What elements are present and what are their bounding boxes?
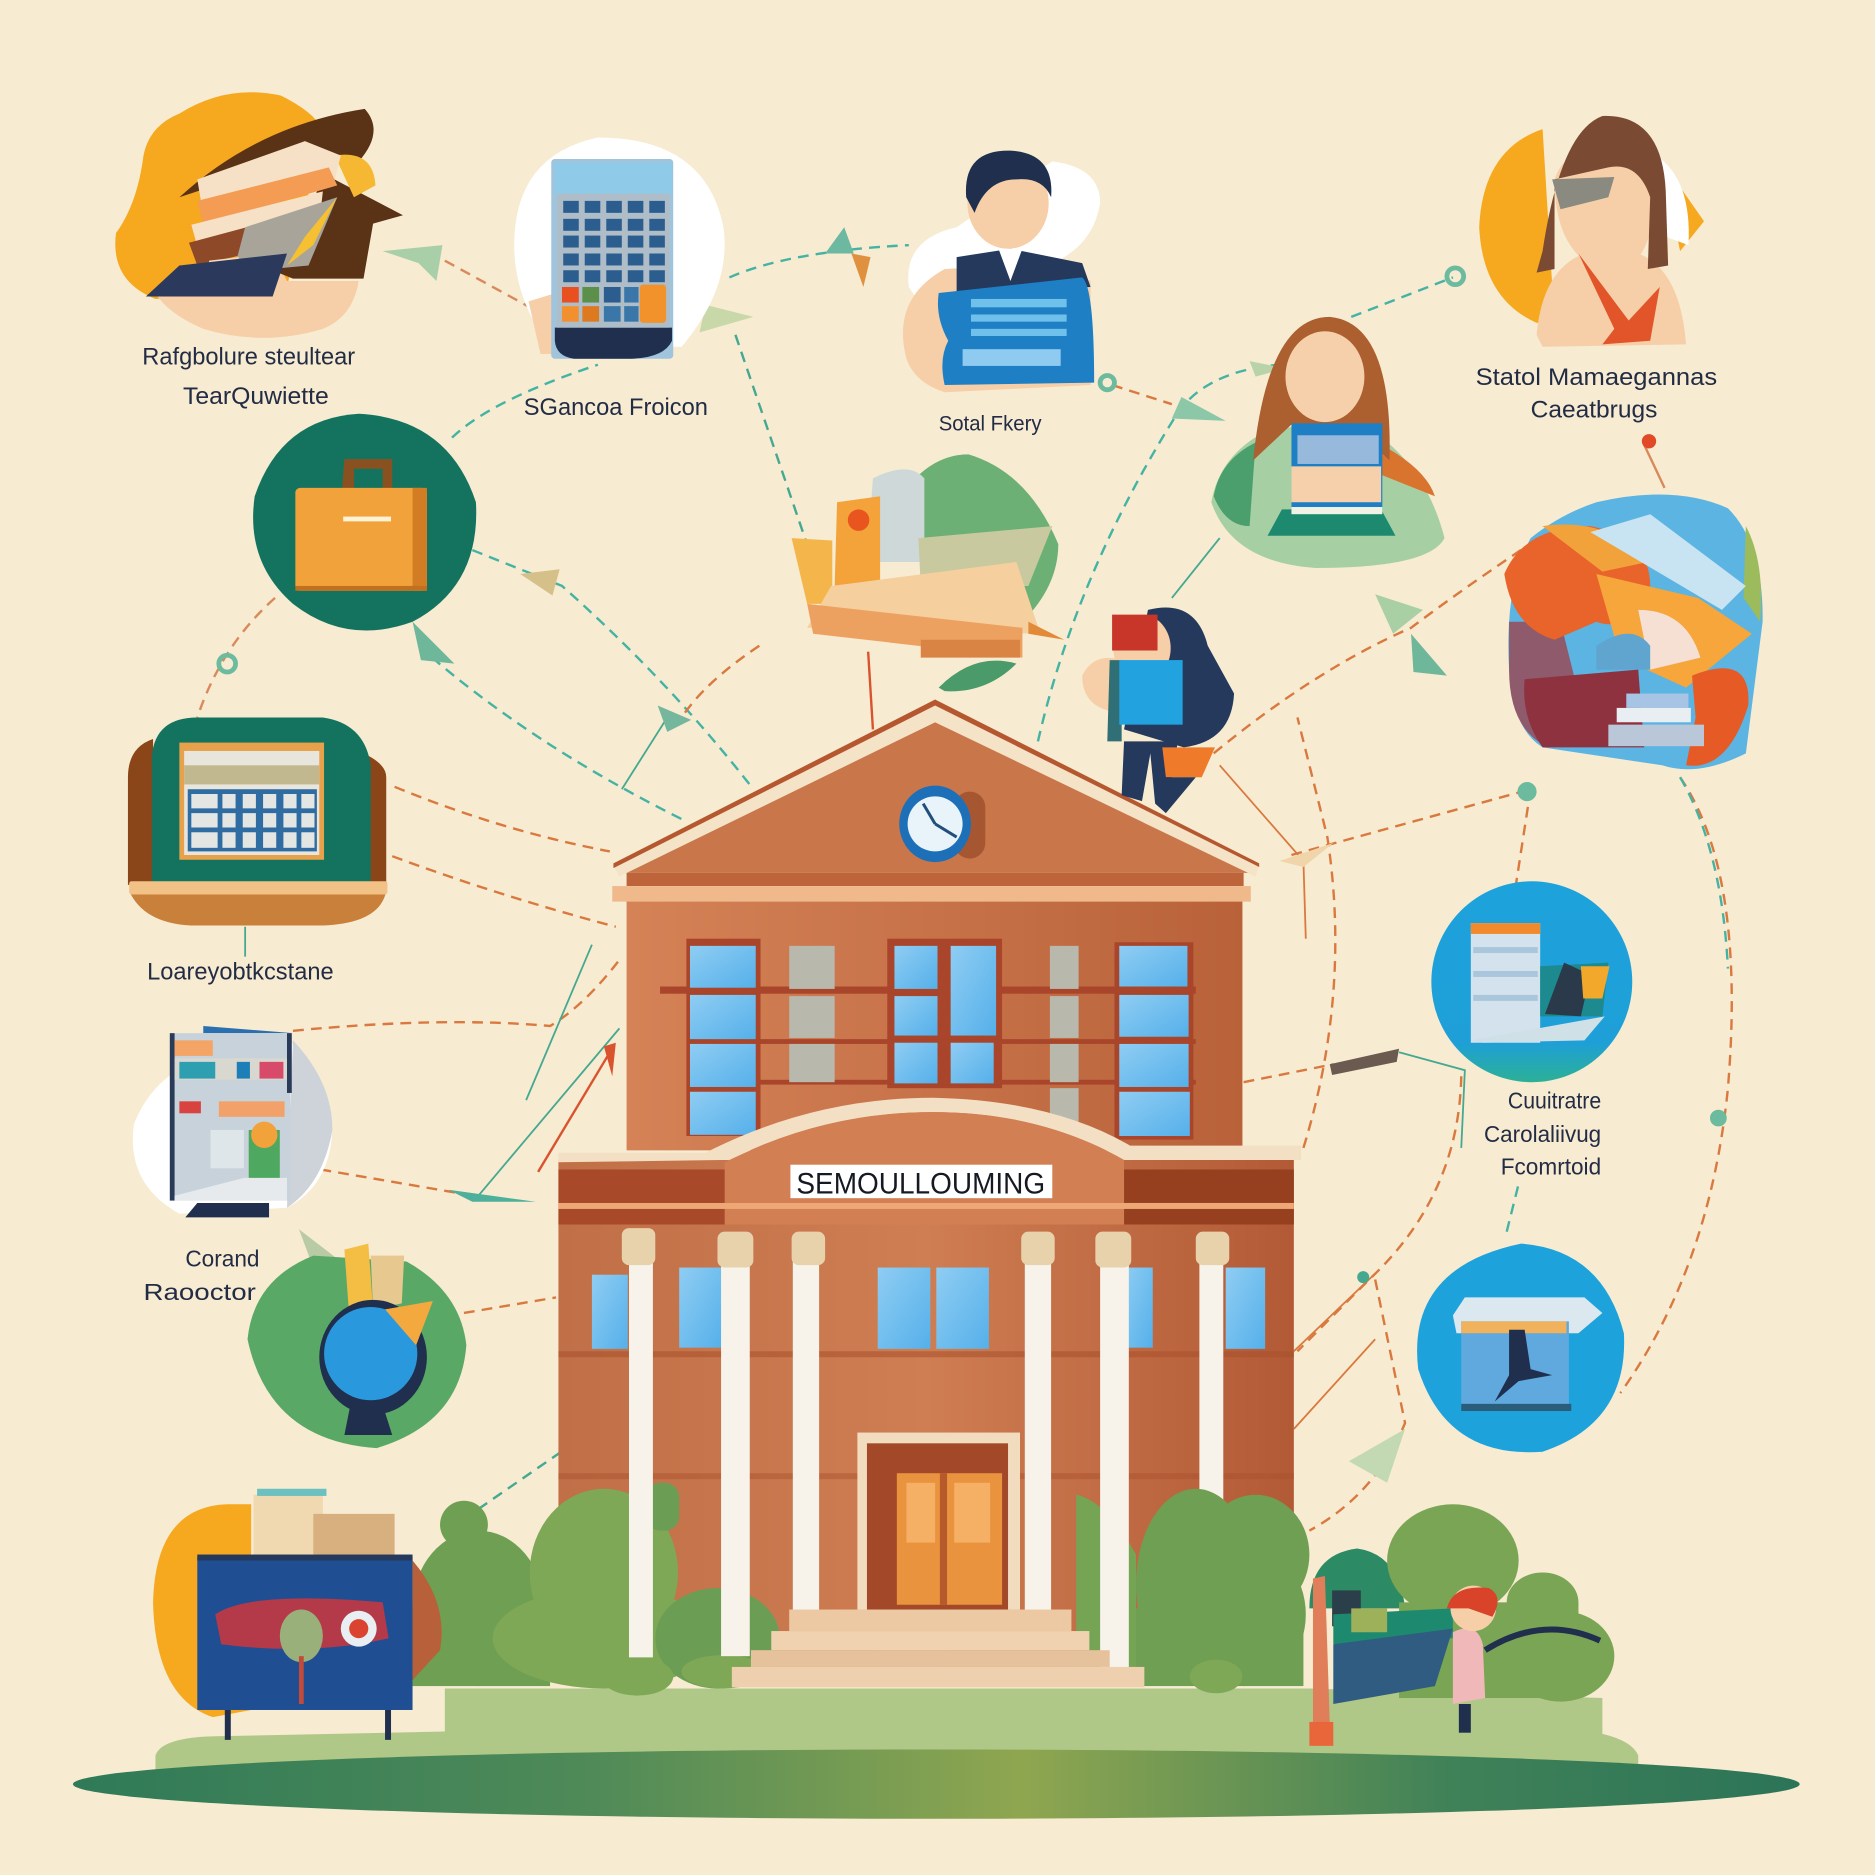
thin solid connector lines [245,445,1665,1429]
columns [622,1228,1131,1668]
icon: screen on green board [128,717,387,926]
label: blue circle [1484,1087,1601,1179]
label: top left [142,344,355,410]
person with cart [1309,1576,1600,1746]
clock [899,786,985,862]
label: tablet: SGancoa Froicon [524,394,708,421]
label: screen: Loareyobtkcstane [147,958,334,985]
upper storey wall [627,899,1242,1150]
label: man: Sotal Fkery [939,411,1042,435]
icon: blue board with orange blob [153,1489,442,1740]
icon: man with folder [903,151,1100,392]
steps [732,1610,1144,1687]
icon: tablet calendar [514,138,725,359]
icon: monitor with app [133,1026,332,1217]
label: woman: Statol Mamaegannas [1476,364,1717,391]
icon: books and laptop [115,92,403,338]
icon: colourful books blob [1504,495,1763,769]
arch panel [725,1112,1124,1224]
connector arrow markers [383,227,1447,1483]
lower windows [592,1268,1265,1349]
label: blue circle: Carolaliivug [1484,1121,1601,1147]
right column [1196,1232,1229,1662]
icon: desk with folders [792,454,1064,691]
label: blue circle: Cuuitratre [1508,1087,1601,1113]
wall band [558,1351,1294,1357]
icon: briefcase circle [253,414,476,631]
icon: globe on green blob [248,1229,466,1448]
frieze [627,873,1244,886]
shrubs [413,1483,1614,1702]
icon: blue circle with books [1431,881,1632,1082]
wall band lower [558,1473,1294,1479]
label: monitor [143,1245,259,1305]
lower storey wall [558,1160,1294,1674]
moulding band [558,1203,1294,1209]
label: top left: TearQuwiette [183,383,329,410]
icon: woman reading book [1211,317,1445,568]
door [857,1433,1020,1610]
label: blue circle: Fcomrtoid [1501,1153,1601,1179]
lawn [155,1688,1638,1770]
icon: person holding book on roof [1082,607,1234,813]
entablature band right [1124,1169,1294,1224]
cream arch and ledge [558,1098,1301,1162]
label: top left: Rafgbolure steultear [142,344,355,371]
entablature band left [558,1169,726,1224]
label: woman [1476,364,1717,423]
cornice [612,886,1251,902]
label: monitor: Raooctor [143,1279,256,1305]
connector dots [219,268,1724,1281]
roof edge [613,700,1259,868]
icon: blue circle with ship [1417,1244,1624,1452]
connector lines [197,245,1732,1531]
building [558,700,1301,1674]
roof pediment [622,722,1253,873]
upper windows [660,939,1196,1140]
ground ellipse [73,1749,1800,1819]
icon: woman with hair [1479,116,1704,347]
sign: SEMOULLOUMING [796,1167,1045,1200]
label: monitor: Corand [185,1245,259,1271]
roof trim [613,703,1259,877]
label: woman: Caeatbrugs [1531,396,1657,423]
portico: columns, door, steps [622,1228,1144,1687]
